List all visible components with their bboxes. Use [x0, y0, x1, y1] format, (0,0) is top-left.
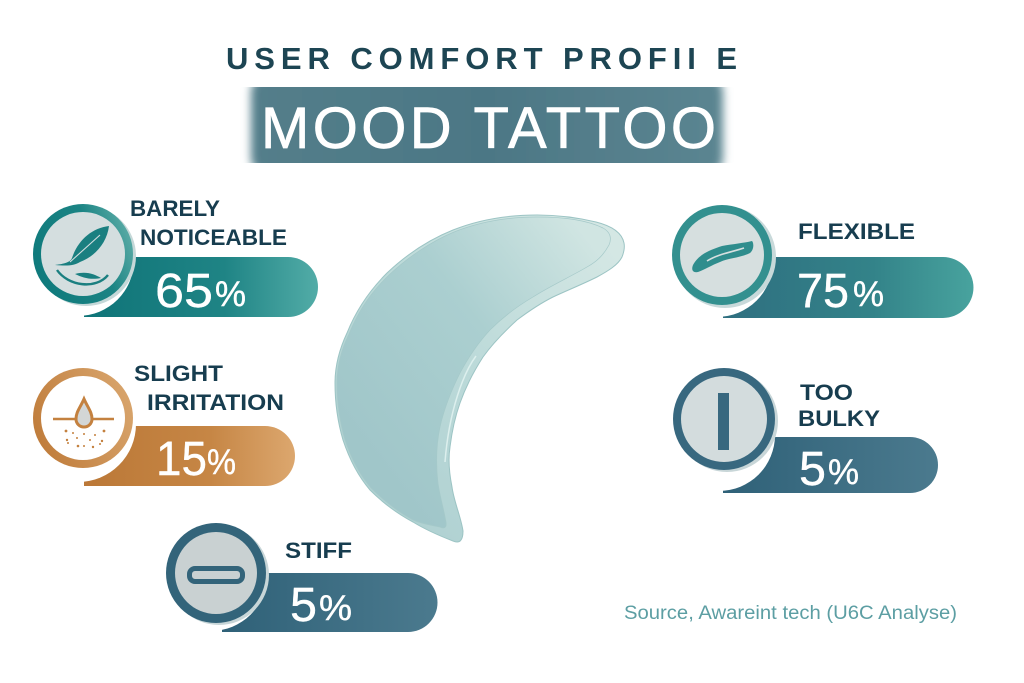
title: user comfort profile: USER COMFORT PROFII E [226, 41, 737, 76]
icon: vertical bar [663, 368, 778, 491]
value [799, 443, 859, 496]
bar [84, 257, 318, 317]
source note: Source, Awareint tech (U6C Analyse) [624, 603, 957, 624]
panel: too bulky 5%: BULKY [798, 406, 880, 431]
value: 65 [155, 265, 213, 318]
bar [222, 573, 438, 632]
panel: flexible 75% [661, 205, 973, 318]
value: % [319, 589, 352, 628]
value: 5 [799, 443, 826, 496]
value [156, 433, 236, 486]
central product: crescent patch [335, 215, 624, 542]
label: FLEXIBLE [798, 219, 915, 244]
value [290, 579, 352, 632]
value: % [215, 275, 246, 314]
panel: stiff 5% [155, 519, 438, 632]
icon: bent strip [661, 205, 776, 317]
value: % [207, 443, 236, 482]
bar [723, 437, 938, 493]
icon: flat bar [155, 519, 269, 631]
value: % [828, 453, 859, 492]
value [155, 265, 246, 318]
label: TOO [800, 380, 853, 405]
label: SLIGHT [134, 361, 224, 386]
label: STIFF [285, 538, 352, 563]
bar [84, 426, 295, 486]
label: BARELY [130, 196, 220, 221]
value: 15 [156, 433, 207, 486]
panel: barely noticeable 65% [22, 196, 318, 318]
panel: too bulky 5% [663, 368, 938, 496]
panel: slight irritation 15% [20, 361, 295, 486]
value: 75 [797, 265, 849, 318]
bar [723, 257, 973, 318]
value: % [853, 275, 884, 314]
value: 5 [290, 579, 317, 632]
title banner: mood tattoo: MOOD TATTOO [261, 96, 716, 161]
icon: skin drop [20, 366, 136, 482]
infographic canvas [33, 48, 974, 632]
value [797, 265, 884, 318]
panel: slight irritation 15%: IRRITATION [147, 390, 284, 415]
icon: feather [22, 204, 136, 316]
panel: barely noticeable 65%: NOTICEABLE [140, 225, 287, 250]
